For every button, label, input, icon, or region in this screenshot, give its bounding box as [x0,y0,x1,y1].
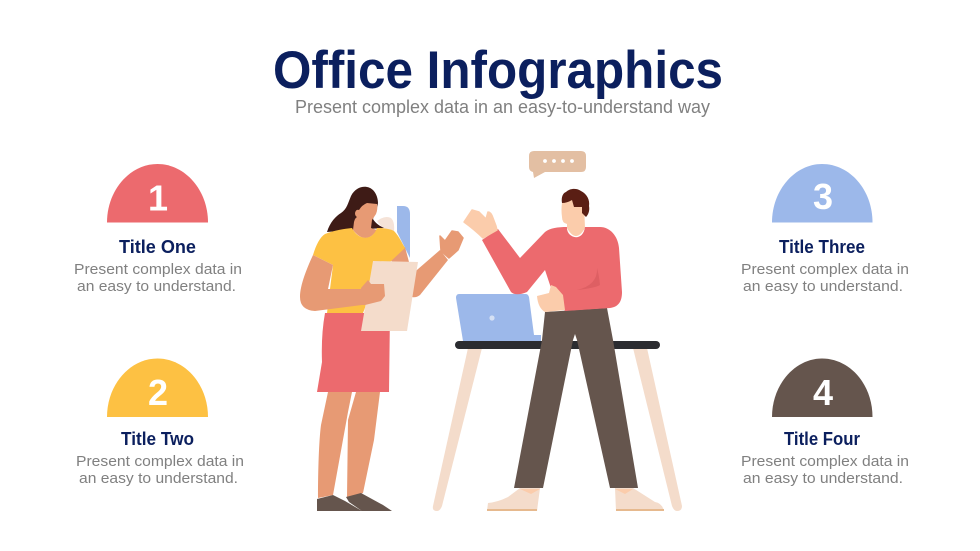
man shoes [487,488,664,511]
woman forearm [410,250,448,297]
woman [300,187,463,511]
body text four: an easy to understand. [743,470,903,487]
body text three: an easy to understand. [743,278,903,295]
sweater fold [577,268,600,290]
number 2: 2 [148,372,168,413]
heading: title one: Title One [119,236,196,257]
body text three: Present complex data in [741,261,909,278]
heading: title two: Title Two [121,428,194,449]
man [464,151,664,511]
paper [361,261,418,331]
woman back arm [390,247,409,275]
woman raised hand [440,231,463,258]
heading: title three: Title Three [779,236,865,257]
man raised hand [464,210,497,238]
body text two: an easy to understand. [79,470,238,487]
desk [433,294,682,511]
desk right leg [633,348,682,511]
subtitle: Present complex data in an easy-to-understand way [295,97,710,117]
number 4: 4 [813,372,833,413]
desk top [455,341,660,349]
blue chair back [397,206,410,258]
heading: title four: Title Four [784,428,860,449]
number 1: 1 [148,178,168,218]
panel: item two [76,358,244,487]
man hand on waist [537,285,565,312]
woman shoes [317,493,392,511]
woman shirt [313,228,405,313]
panel: item four [741,358,909,487]
semicircle badge 2 [107,358,208,417]
pale object behind woman [377,217,394,231]
laptop [456,294,541,341]
semicircle badge 3 [772,164,872,222]
woman near arm [300,255,362,311]
body text four: Present complex data in [741,453,909,470]
title: Office Infographics [273,41,723,100]
man sweater [482,227,622,311]
semicircle badge 1 [107,164,208,222]
man neck and face [562,198,585,236]
woman skirt [317,313,390,392]
panel: item three [741,164,909,295]
illustration: office conversation [300,151,682,511]
number 3: 3 [813,176,833,217]
panel: item one [74,164,242,295]
speech bubble [529,151,586,178]
body text one: Present complex data in [74,261,242,278]
woman neck and face [353,203,377,238]
woman hand on paper [361,280,385,305]
man hair [562,189,589,217]
body text one: an easy to understand. [77,278,236,295]
semicircle badge 4 [772,358,872,417]
body text two: Present complex data in [76,453,244,470]
woman legs [318,392,380,498]
man trousers [514,308,638,488]
woman hair [327,187,384,232]
desk left leg [433,348,482,511]
